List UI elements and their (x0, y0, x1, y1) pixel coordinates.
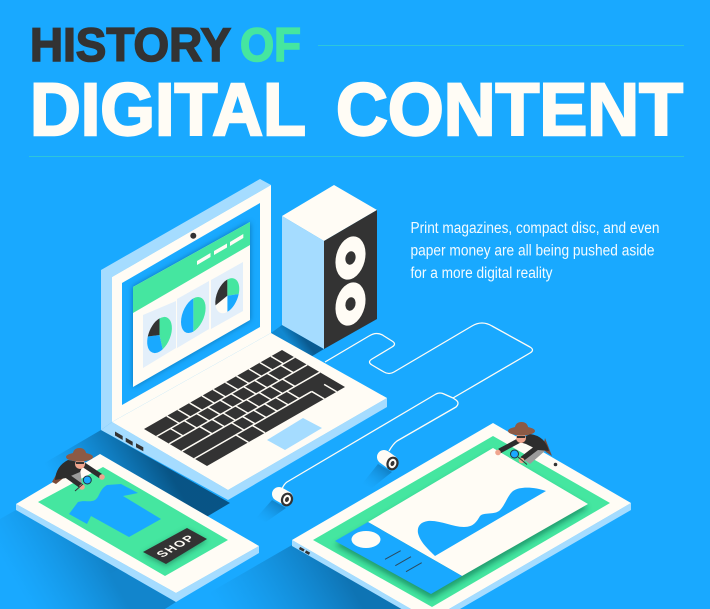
webcam (190, 233, 196, 239)
trackpad (267, 418, 322, 450)
intro text block: for a more digital reality (410, 265, 553, 282)
magnifier (510, 450, 527, 464)
intro text block: Print magazines, compact disc, and even (410, 220, 660, 237)
speaker cone upper (331, 233, 370, 283)
title (29, 18, 684, 157)
heading: digital content: CONTENT (336, 68, 683, 151)
avatar circle (352, 531, 380, 548)
tablet: shop (16, 454, 259, 602)
ground shadows (0, 325, 410, 609)
chart panel 1 (143, 301, 176, 368)
audio cable (282, 323, 532, 489)
intro text block (410, 220, 660, 282)
laptop (101, 179, 387, 500)
speaker (282, 185, 377, 349)
shirt (69, 484, 161, 537)
speaker cone lower (331, 279, 370, 329)
heading: history of: OF (240, 18, 301, 71)
icon: earbud right (362, 455, 401, 488)
text lines (385, 551, 422, 572)
port dots (300, 548, 310, 554)
figure: detective right (495, 422, 552, 464)
heading: digital content: DIGITAL (30, 68, 306, 151)
magnifier (75, 476, 91, 491)
shop label (143, 528, 207, 564)
intro text block: paper money are all being pushed aside (410, 242, 654, 260)
icon: earbud left (256, 491, 295, 522)
tablet: image viewer (292, 423, 631, 609)
heading: history of: HISTORY (30, 18, 231, 71)
chart panel 2 (177, 281, 209, 348)
mountain image (418, 488, 546, 556)
screen window (133, 222, 250, 387)
figure: detective left (52, 448, 105, 491)
laptop lid (101, 179, 271, 430)
shop label: SHOP (153, 533, 198, 559)
laptop base (101, 333, 387, 500)
chart panel 3 (211, 262, 243, 329)
heading: digital content (30, 68, 683, 151)
keyboard (144, 350, 345, 466)
